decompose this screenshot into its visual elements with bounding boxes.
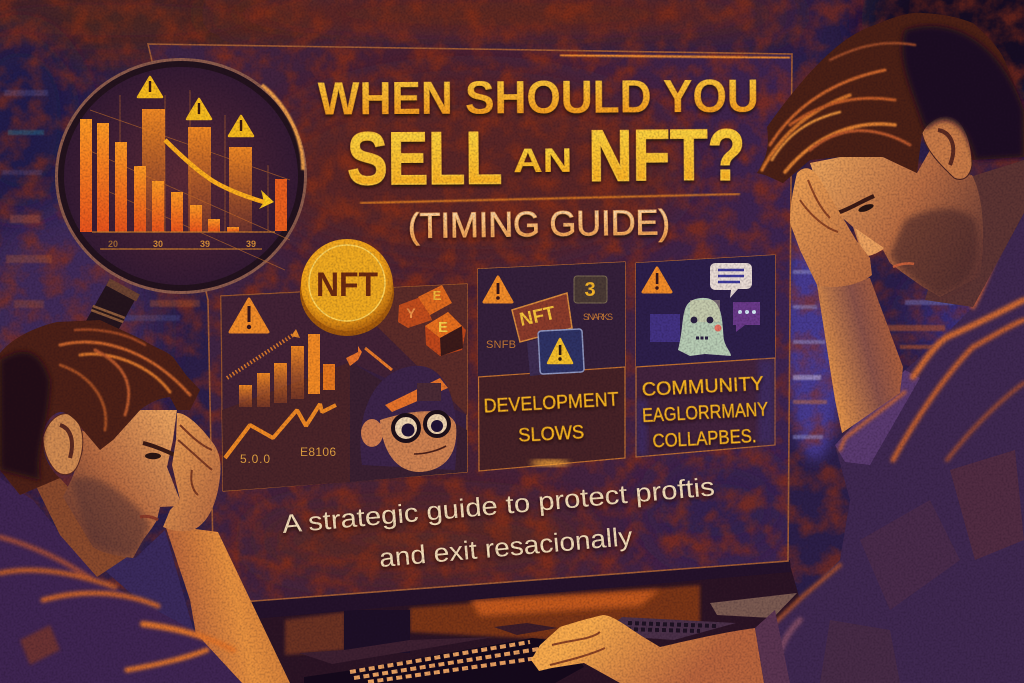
icon: NFT card: NFT <box>518 303 558 331</box>
panel: price and sentiment <box>221 284 467 491</box>
beard shading <box>70 477 150 556</box>
sleeve cuff <box>755 610 790 683</box>
hand on head <box>790 168 872 287</box>
device <box>710 593 797 618</box>
axis labels: 39 <box>246 239 256 249</box>
forearm <box>165 525 290 683</box>
icon: speech bubble <box>710 263 752 298</box>
chart labels <box>240 445 336 466</box>
icon: warning triangle <box>230 299 268 332</box>
glow <box>530 460 570 466</box>
title: AN <box>513 142 572 180</box>
phone <box>494 623 558 635</box>
hand on forehead <box>163 413 221 531</box>
icon: letter cubes: E <box>438 319 448 336</box>
beard shading <box>890 209 978 296</box>
icon: letter cubes: E <box>433 288 442 303</box>
icon: NFT card <box>512 293 584 376</box>
axis labels: 30 <box>153 239 163 249</box>
icon: ghost <box>678 298 731 356</box>
neck <box>925 160 1024 307</box>
ear <box>43 414 83 475</box>
desk <box>214 565 800 683</box>
monitor stand <box>344 610 410 653</box>
numpad <box>600 617 736 640</box>
caption labels <box>486 312 613 351</box>
tagline: A strategic guide to protect proftis <box>281 471 716 539</box>
person: left man <box>0 320 290 683</box>
chart labels: 5.0.0 <box>240 452 270 466</box>
icon: badge <box>574 276 607 303</box>
top edge glow <box>560 55 790 58</box>
axis labels: 20 <box>108 239 118 249</box>
tagline <box>281 471 716 573</box>
panel heading: COLLAPBES. <box>652 426 757 453</box>
icon: monkey NFT avatar <box>346 346 457 472</box>
line chart arrow <box>225 404 336 458</box>
panel heading: DEVELOPMENT <box>483 389 619 417</box>
divider glow <box>360 194 740 203</box>
facial features <box>140 443 177 520</box>
panel heading: COMMUNITY <box>641 374 765 401</box>
title: NFT? <box>588 116 745 197</box>
stand base <box>299 637 494 664</box>
title: WHEN SHOULD YOU <box>318 69 759 125</box>
icon: NFT coin: NFT <box>316 266 378 304</box>
icon: warning triangle <box>643 268 671 292</box>
shirt <box>755 213 1024 683</box>
neck <box>33 478 130 577</box>
icon: badge: 3 <box>584 279 596 301</box>
icons: warning triangles <box>138 77 253 136</box>
title: SELL <box>347 116 502 200</box>
bar chart <box>227 329 335 407</box>
subtitle: timing guide: (TIMING GUIDE) <box>408 203 670 246</box>
panel heading <box>483 389 621 448</box>
panel: community collapses <box>636 255 775 457</box>
panel: development slows <box>478 262 625 471</box>
person: right man <box>531 13 1024 683</box>
panel heading: EAGLORRMANY <box>642 399 769 427</box>
axis labels <box>108 239 256 249</box>
magnifying glass <box>55 58 307 345</box>
hand on keyboard <box>531 610 790 683</box>
hair <box>757 13 1024 183</box>
keyboard <box>304 638 584 683</box>
panel heading: SLOWS <box>518 422 585 447</box>
face <box>63 410 180 558</box>
panel heading <box>640 373 770 453</box>
icon: warning triangle <box>484 277 512 302</box>
axis labels: 39 <box>200 239 210 249</box>
caption labels: SNARKS <box>583 312 613 322</box>
ear <box>922 116 972 179</box>
caption labels: SNFB <box>486 339 516 351</box>
shirt <box>0 478 242 683</box>
facial features <box>837 196 914 267</box>
hair <box>0 320 200 495</box>
face <box>810 150 983 297</box>
icon: letter cubes: Y <box>406 305 416 321</box>
title <box>318 69 759 201</box>
handle <box>78 282 138 345</box>
icon: chat bubble <box>733 302 760 332</box>
monitor <box>140 40 800 664</box>
icon: letter cubes <box>398 285 466 356</box>
chart labels: E8106 <box>300 445 336 459</box>
background gap <box>87 530 195 635</box>
bezel <box>214 560 791 622</box>
forearm raised <box>817 278 903 433</box>
bar chart: falling prices <box>80 90 290 270</box>
keyboards and devices <box>304 593 797 683</box>
icon: NFT coin <box>300 239 394 336</box>
tagline: and exit resacionally <box>378 521 634 573</box>
